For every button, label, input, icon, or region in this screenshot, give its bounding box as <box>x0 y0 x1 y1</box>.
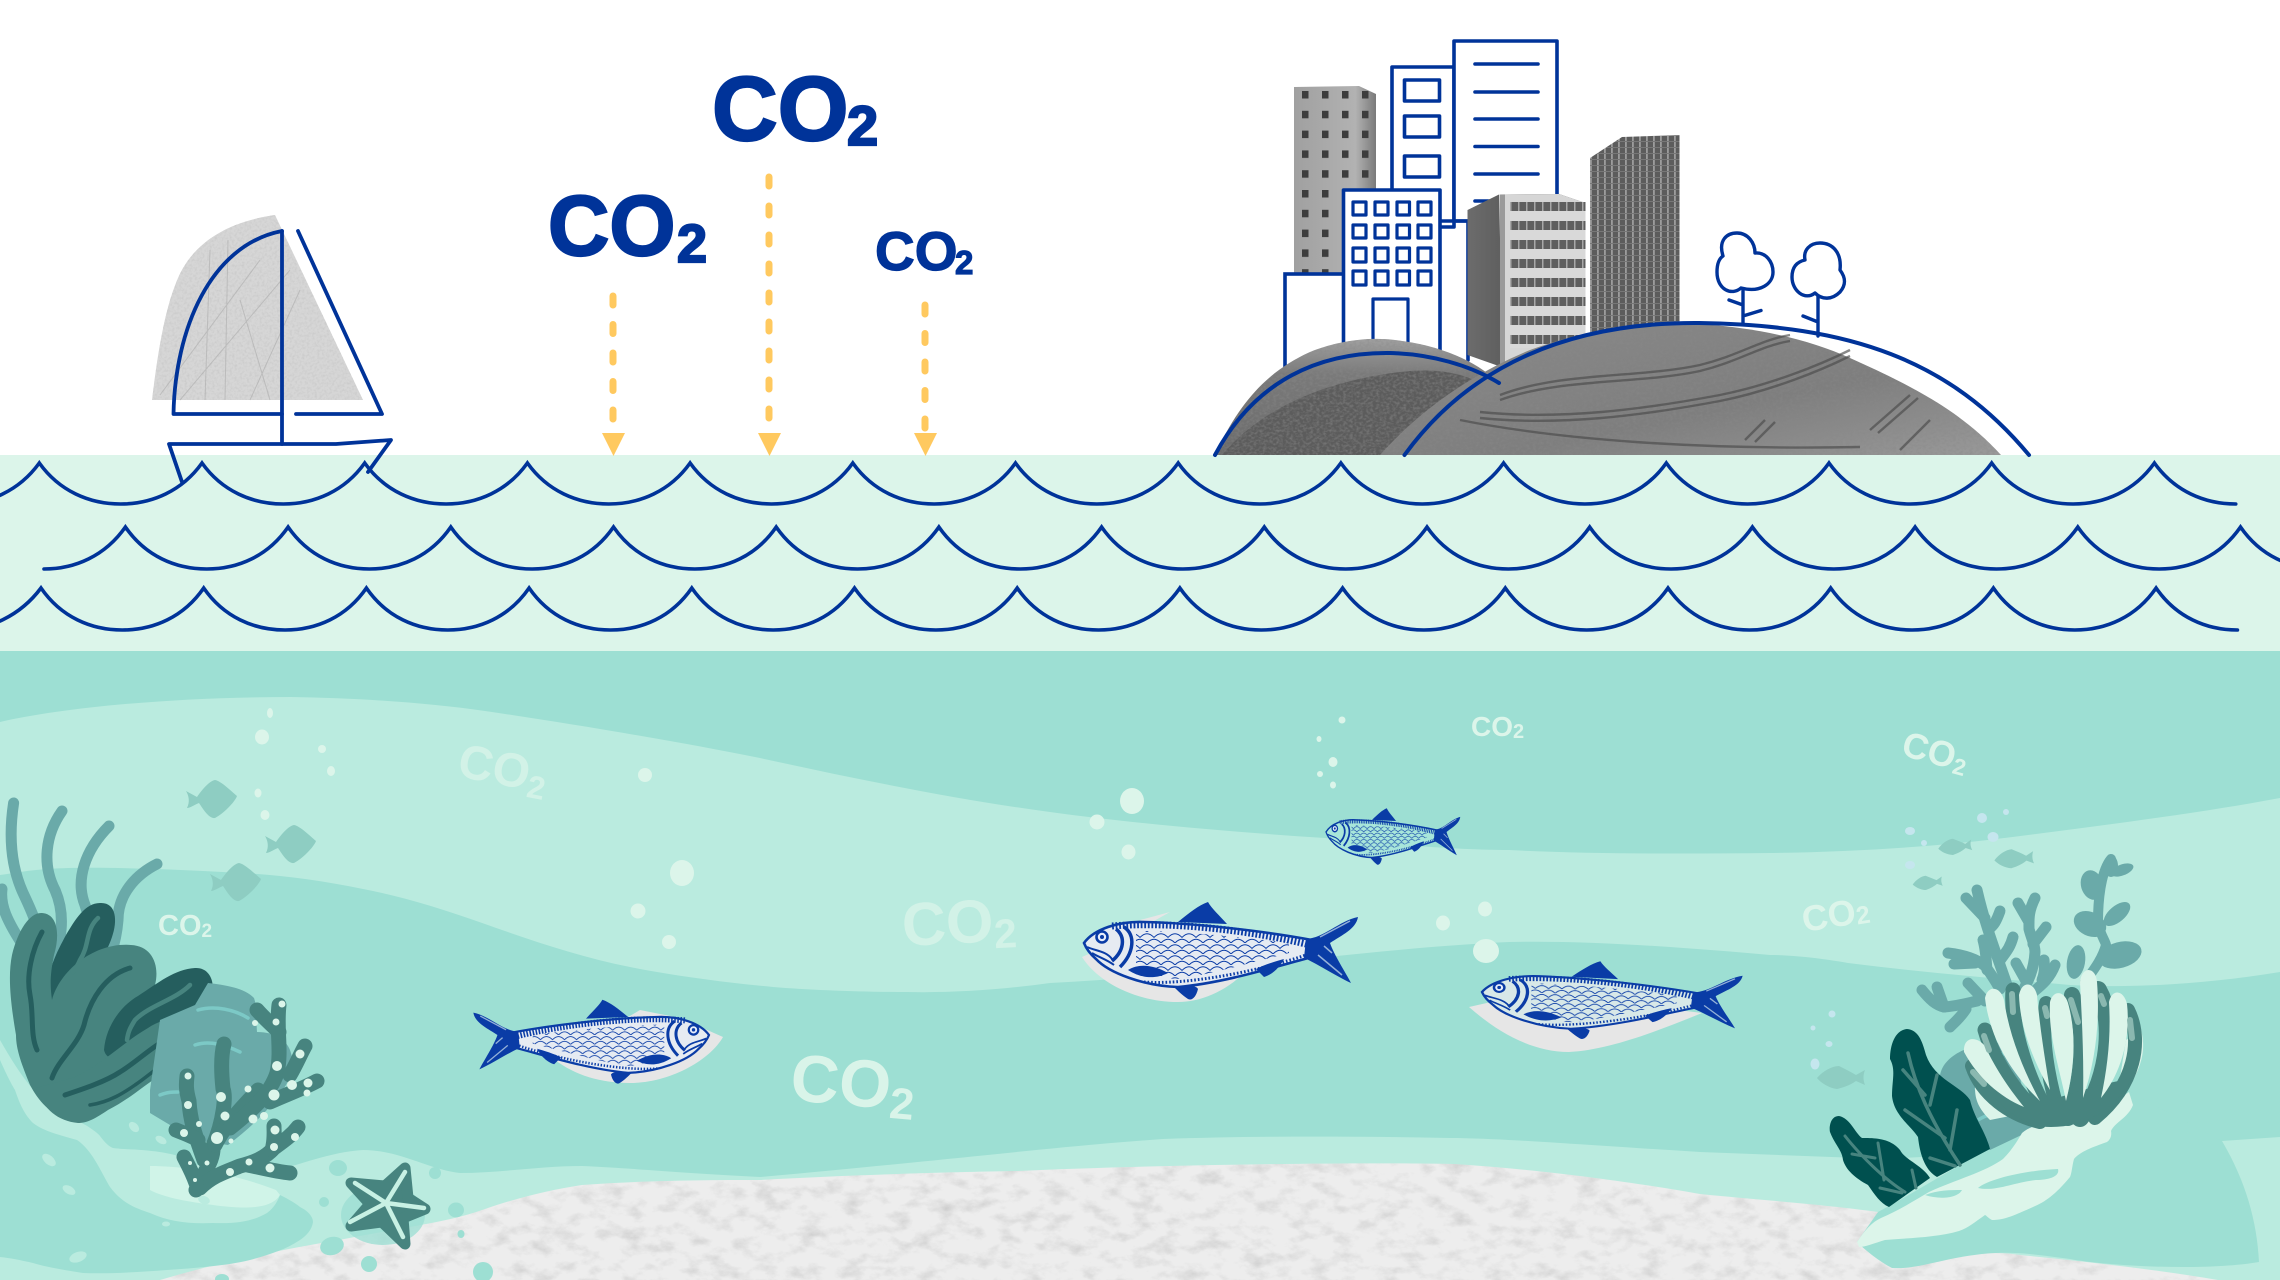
herring fish small <box>1326 808 1460 865</box>
hill outlines <box>1215 323 2029 455</box>
shell behind coral <box>150 983 292 1145</box>
teal reef mound <box>0 1060 313 1273</box>
silver backing <box>555 1010 723 1083</box>
reef left <box>0 1060 313 1273</box>
label: CO2 small: 2 <box>955 244 973 281</box>
arrow: CO2 absorption centre <box>758 177 781 456</box>
label: CO2 medium: CO <box>548 179 676 274</box>
silver backing <box>1082 912 1245 1002</box>
bubbles pale blue right <box>1810 809 2009 1070</box>
anemone base <box>1985 1078 2132 1127</box>
reef pebbles <box>40 1120 252 1265</box>
hill photo left <box>1215 339 1500 455</box>
wave row 2 <box>44 527 2280 569</box>
wave row 3 <box>0 588 2237 630</box>
ghost CO2 label upper right: CO <box>1471 711 1513 742</box>
arrow: CO2 absorption right <box>914 305 937 456</box>
ghost CO2 label right lower: CO <box>1799 891 1859 940</box>
photo tower middle <box>1468 194 1586 370</box>
panel: deep ocean water <box>0 651 2280 1280</box>
label: CO2 large: CO <box>712 59 848 160</box>
photo tower left <box>1294 86 1376 275</box>
upper reef shadow <box>90 1090 300 1165</box>
ghost CO2 label far right: CO <box>1898 723 1961 777</box>
back kelp <box>2064 855 2145 982</box>
fish drawing <box>1481 959 1743 1042</box>
outline tower back <box>1392 41 1557 360</box>
hill photo right <box>1380 324 2001 455</box>
rock hollows <box>1925 1169 2058 1198</box>
lower lobe <box>36 1019 203 1123</box>
coral left <box>176 1000 317 1190</box>
seaweed dark frond back <box>47 903 115 1007</box>
bubbles pale <box>254 708 1499 963</box>
photo tower right <box>1590 135 1680 335</box>
sky background <box>0 0 2280 455</box>
anemone green tentacles <box>1972 990 2135 1122</box>
label: CO2 large: 2 <box>847 94 878 157</box>
panel: sea surface band <box>0 455 2280 652</box>
pale rock <box>1857 1092 2133 1247</box>
herring fish right <box>1469 959 1743 1052</box>
back coral branching <box>1922 890 2055 1027</box>
wave row 1 <box>0 463 2236 504</box>
sailboat <box>152 215 391 482</box>
ghost CO2 label centre: 2 <box>993 910 1018 957</box>
fish drawing <box>473 1000 709 1084</box>
outline low block <box>1285 274 1345 389</box>
textured grey sail <box>152 215 363 400</box>
school of small fish left <box>186 780 316 901</box>
pale reef sand <box>150 1166 280 1208</box>
wave lines <box>0 463 2280 630</box>
seaweed main frond <box>10 913 213 1123</box>
ghost CO2 label upper left: 2 <box>524 768 548 807</box>
dark leaf small <box>1830 1116 1930 1207</box>
ghost CO2 label upper right: 2 <box>1513 721 1524 743</box>
seaweed back fronds <box>2 803 157 985</box>
ghost CO2 label right lower: 2 <box>1854 901 1872 930</box>
bubbles around starfish <box>215 1160 493 1280</box>
mound <box>1857 1092 2259 1268</box>
dark leaf large <box>1890 1029 1990 1177</box>
anemone white tentacles back <box>1975 1030 2143 1120</box>
veins <box>29 932 180 1105</box>
ghost CO2 label by seaweed: 2 <box>202 921 212 942</box>
ghost CO2 label centre: CO <box>900 886 995 959</box>
label: CO2 small: CO <box>875 220 958 282</box>
anemone white tentacles <box>1964 970 2128 1107</box>
anemone highlights <box>1973 994 2132 1084</box>
panel: sandy sea floor <box>160 1163 2218 1280</box>
boat outline <box>169 231 391 482</box>
outline tower front <box>1344 190 1440 355</box>
dark lobe <box>104 968 213 1058</box>
ghost CO2 label far right: 2 <box>1950 753 1969 781</box>
reef right <box>1830 855 2259 1268</box>
ghost CO2 label upper left: CO <box>454 735 535 801</box>
tree 2 <box>1792 243 1844 336</box>
label: CO2 medium: 2 <box>677 214 707 274</box>
starfish <box>341 1168 425 1245</box>
ghost CO2 label by seaweed: CO <box>158 910 202 942</box>
hill tracks <box>1460 335 1930 450</box>
herring fish centre <box>1082 902 1358 1002</box>
tree 1 <box>1717 233 1773 324</box>
ghost CO2 label lower centre: CO <box>788 1040 894 1124</box>
coral spots <box>180 1000 312 1182</box>
city on hills <box>1215 41 2029 455</box>
arrow: CO2 absorption left <box>602 296 625 456</box>
ghost CO2 label lower centre: 2 <box>887 1079 916 1130</box>
school of small fish right <box>1817 837 2034 1089</box>
shell behind leaves <box>1940 1043 2032 1150</box>
fish drawing <box>1084 902 1358 1000</box>
herring fish left <box>473 1000 723 1084</box>
silver backing <box>1469 1000 1702 1052</box>
